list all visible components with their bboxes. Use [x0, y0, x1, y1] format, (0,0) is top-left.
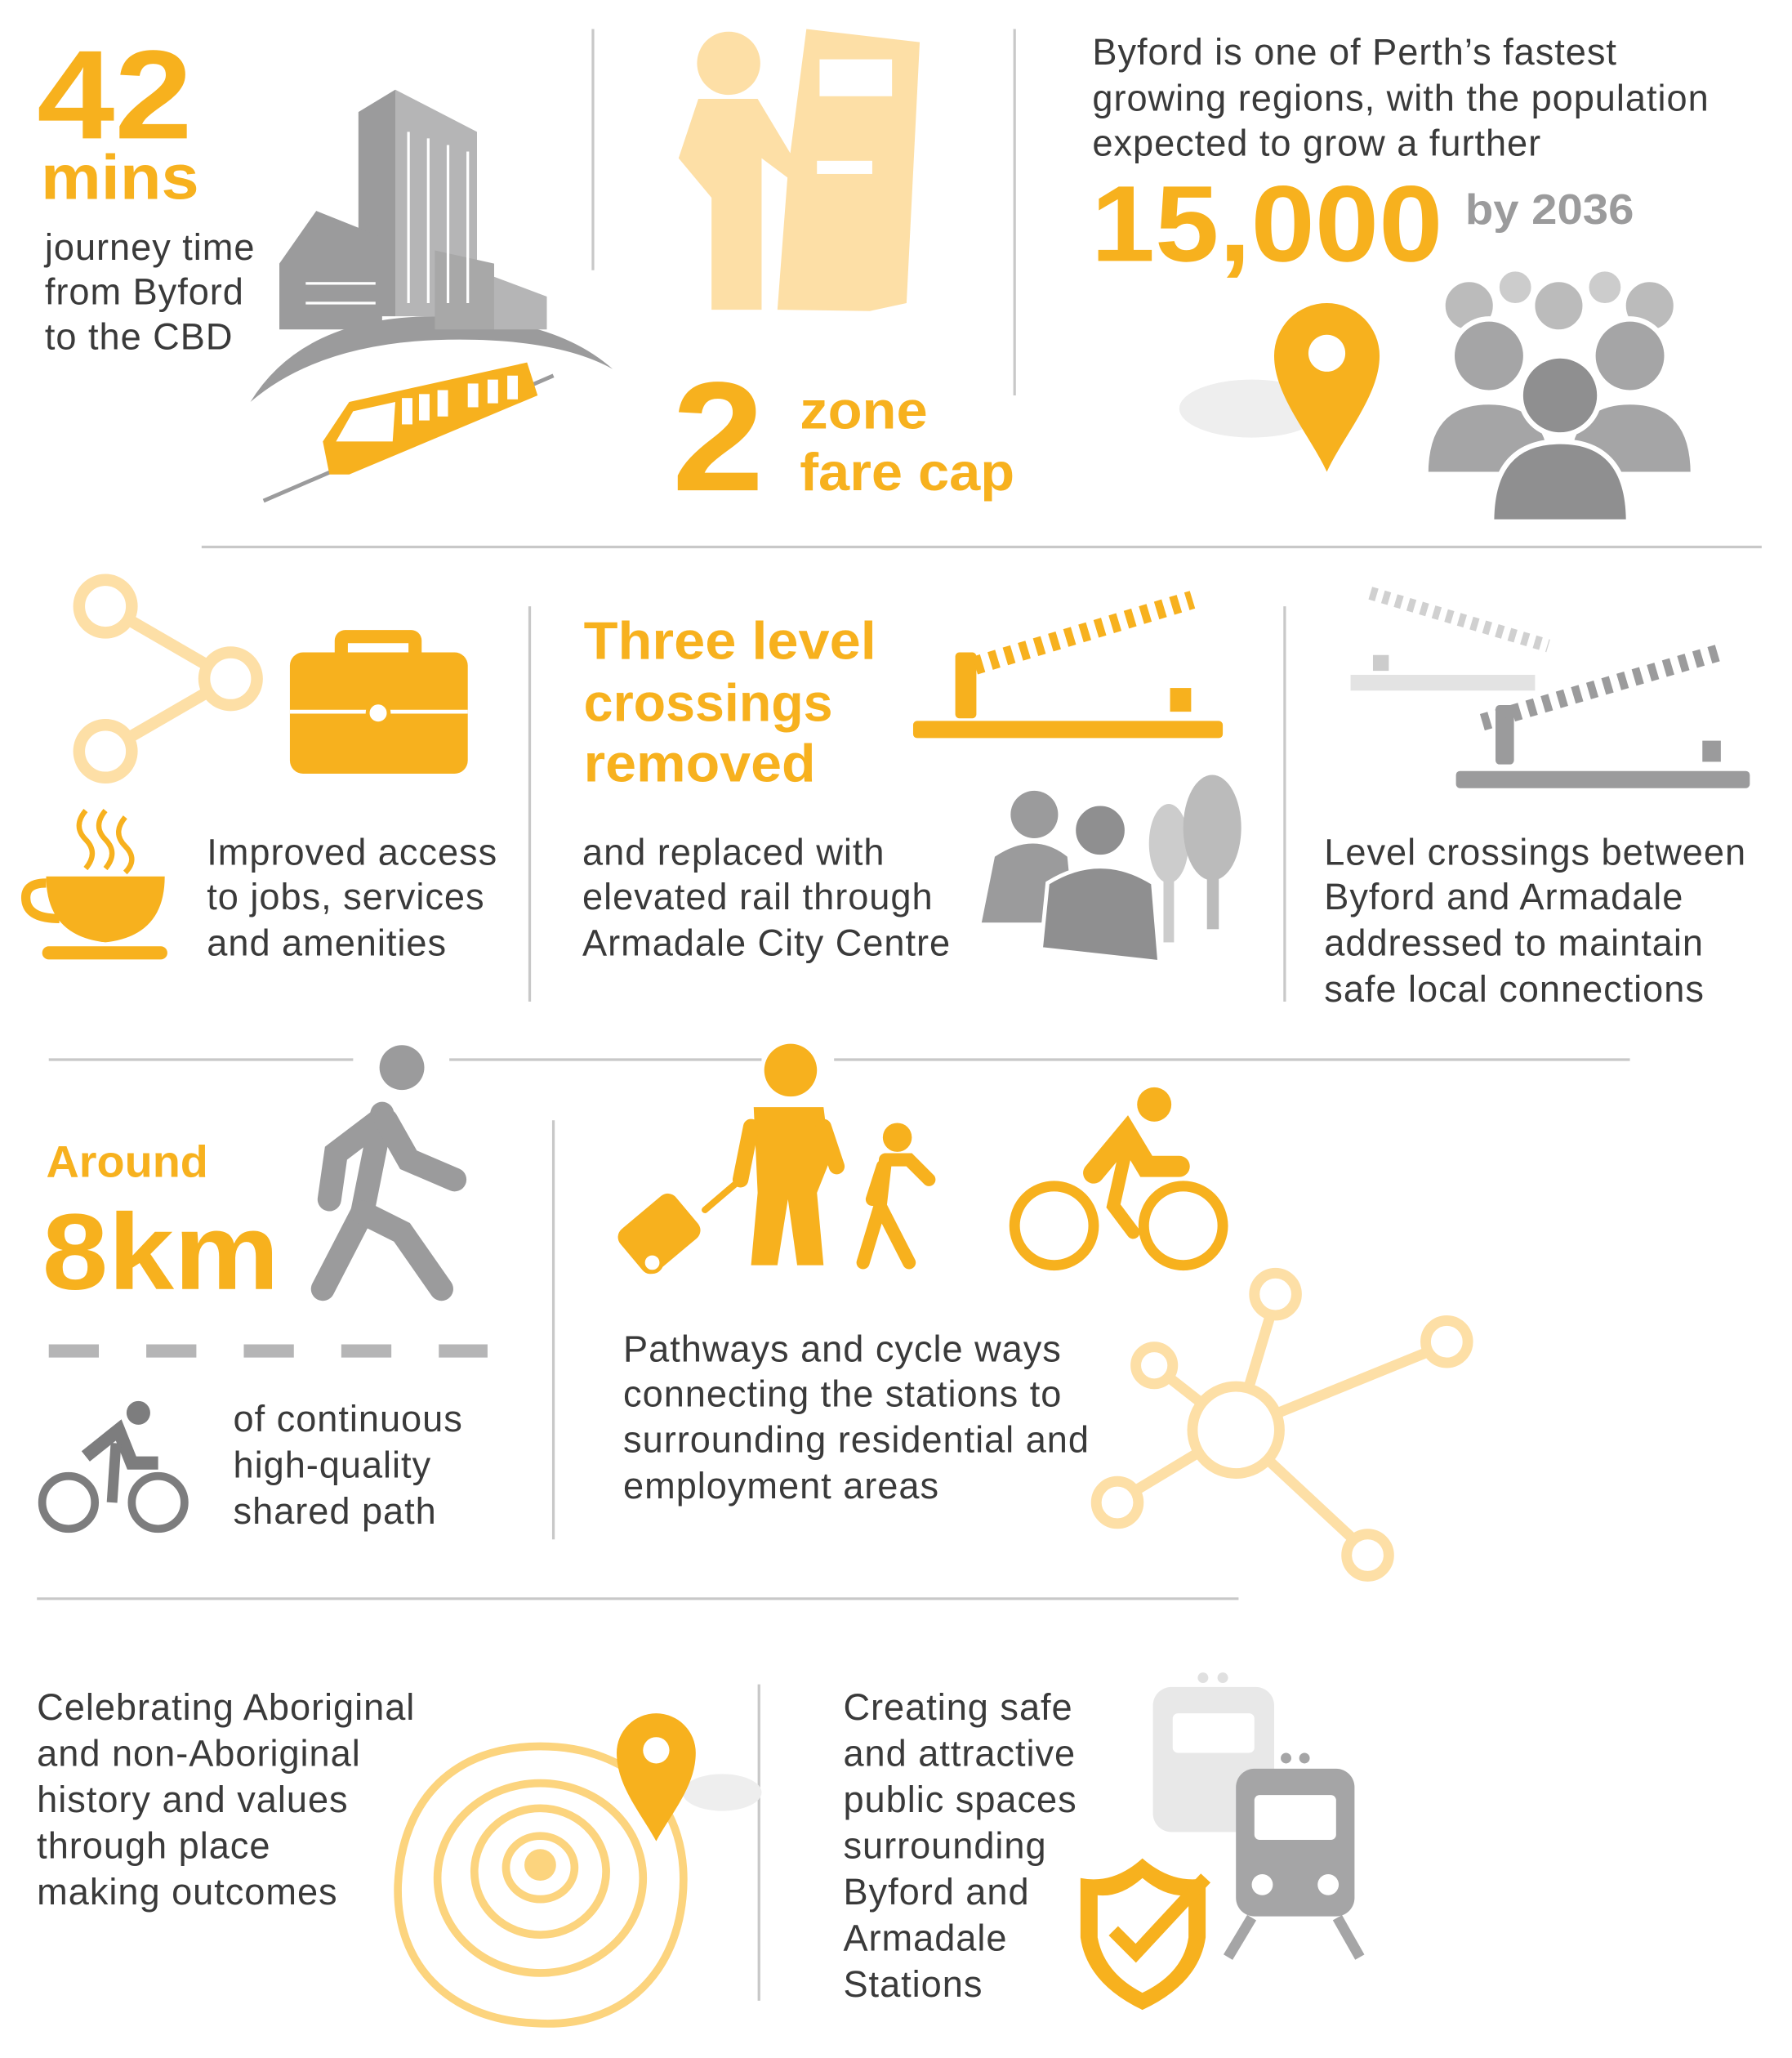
text: celebrating history: making outcomes: [37, 1871, 338, 1913]
text: population growth: 15,000: [1091, 163, 1442, 284]
stat: 42 mins: mins: [41, 143, 199, 213]
icon: people and trees: [982, 775, 1241, 962]
stat: 42 mins: [37, 24, 255, 357]
icon: briefcase: [290, 630, 468, 774]
text: safe public spaces: [843, 1686, 1077, 2005]
text: population growth: [1091, 31, 1710, 284]
text: level crossings addressed: addressed to maintain: [1324, 922, 1704, 964]
icon: traveller and child: [613, 1044, 929, 1279]
text: safe public spaces: surrounding: [843, 1825, 1047, 1867]
icon: person at ticket machine: [679, 29, 920, 311]
text: level crossings addressed: [1324, 831, 1746, 1010]
text: population growth: growing regions, with the population: [1092, 78, 1710, 119]
text: celebrating history: [37, 1686, 415, 1913]
text: pathways: surrounding residential and: [623, 1419, 1090, 1461]
text: safe public spaces: public spaces: [843, 1779, 1077, 1820]
stat: 2 zone fare cap: 2: [672, 350, 764, 524]
text: population growth: Byford is one of Perth’s fastest: [1092, 31, 1617, 73]
icon: trains and shield: [1081, 1672, 1360, 2010]
icon: gray bicycle: [42, 1401, 185, 1529]
stat: 2 zone fare cap: [672, 350, 1014, 524]
text: pathways: Pathways and cycle ways: [623, 1328, 1062, 1369]
stat: 2 zone fare cap: zone: [800, 381, 928, 440]
icon: city and train: [251, 90, 613, 501]
icon: yellow cyclist: [1014, 1087, 1223, 1266]
stat: 42 mins: to the CBD: [45, 315, 233, 357]
text: shared path: [234, 1398, 463, 1532]
stat: around 8km: [42, 1136, 279, 1313]
text: level crossings addressed: safe local connections: [1324, 968, 1705, 1010]
text: safe public spaces: Armadale: [843, 1917, 1007, 1959]
heading: three level crossings: Three level: [584, 612, 876, 671]
icon: yellow boom gate: [913, 600, 1223, 738]
icon: concentric circles with pin: [398, 1713, 761, 2024]
icon: crowd: [1426, 269, 1693, 522]
text: celebrating history: through place: [37, 1825, 270, 1867]
text: safe public spaces: and attractive: [843, 1733, 1076, 1775]
stat: around 8km: 8km: [42, 1192, 279, 1313]
icon: share network: [79, 580, 257, 778]
stat: around 8km: Around: [46, 1136, 208, 1187]
text: population growth: expected to grow a further: [1092, 122, 1541, 163]
text: elevated rail: Armadale City Centre: [582, 922, 951, 964]
text: pathways: [623, 1328, 1090, 1507]
heading: three level crossings: removed: [584, 734, 816, 793]
text: improved access: [207, 831, 497, 964]
text: celebrating history: and non-Aboriginal: [37, 1733, 361, 1775]
icon: location pin: [1179, 303, 1380, 472]
stat: 42 mins: from Byford: [45, 271, 244, 313]
text: celebrating history: history and values: [37, 1779, 349, 1820]
text: elevated rail: elevated rail through: [582, 876, 934, 917]
heading: three level crossings: crossings: [584, 673, 833, 732]
icon: hub network: [1096, 1273, 1468, 1576]
text: level crossings addressed: Level crossings between: [1324, 831, 1746, 873]
text: improved access: Improved access: [207, 831, 497, 873]
text: safe public spaces: Creating safe: [843, 1686, 1073, 1728]
icon: walking person: [323, 1045, 455, 1289]
text: level crossings addressed: Byford and Armadale: [1324, 876, 1683, 917]
icon: coffee cup: [26, 810, 167, 959]
text: improved access: to jobs, services: [207, 876, 485, 917]
text: population growth: by 2036: [1465, 185, 1634, 233]
text: pathways: employment areas: [623, 1465, 939, 1507]
stat: 42 mins: journey time: [43, 226, 255, 268]
text: shared path: high-quality: [234, 1444, 431, 1485]
stat: 42 mins: 42: [37, 24, 193, 165]
text: pathways: connecting the stations to: [623, 1373, 1062, 1414]
text: elevated rail: [582, 831, 951, 964]
text: shared path: of continuous: [234, 1398, 463, 1440]
text: celebrating history: Celebrating Aboriginal: [37, 1686, 415, 1728]
text: elevated rail: and replaced with: [582, 831, 885, 873]
heading: three level crossings: [584, 612, 876, 793]
icon: gray boom gates: [1351, 593, 1750, 788]
text: safe public spaces: Byford and: [843, 1871, 1030, 1913]
text: improved access: and amenities: [207, 922, 447, 964]
dashed path: [49, 1347, 488, 1355]
text: safe public spaces: Stations: [843, 1963, 983, 2005]
text: shared path: shared path: [234, 1490, 437, 1532]
stat: 2 zone fare cap: fare cap: [800, 443, 1014, 502]
